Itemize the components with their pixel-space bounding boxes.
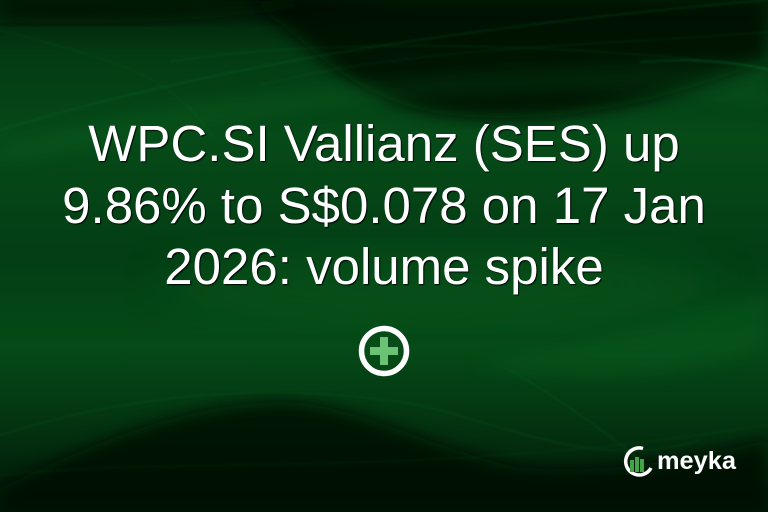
icon: plus in circle — [358, 326, 410, 376]
title: 9.86% to S$0.078 on 17 Jan — [62, 176, 706, 234]
logo wordmark: meyka — [657, 447, 737, 475]
logo ring — [626, 448, 651, 475]
title — [62, 115, 706, 296]
logo: meyka — [624, 446, 737, 477]
title: WPC.SI Vallianz (SES) up — [88, 115, 680, 172]
logo bars — [630, 457, 644, 472]
title: 2026: volume spike — [164, 238, 604, 295]
